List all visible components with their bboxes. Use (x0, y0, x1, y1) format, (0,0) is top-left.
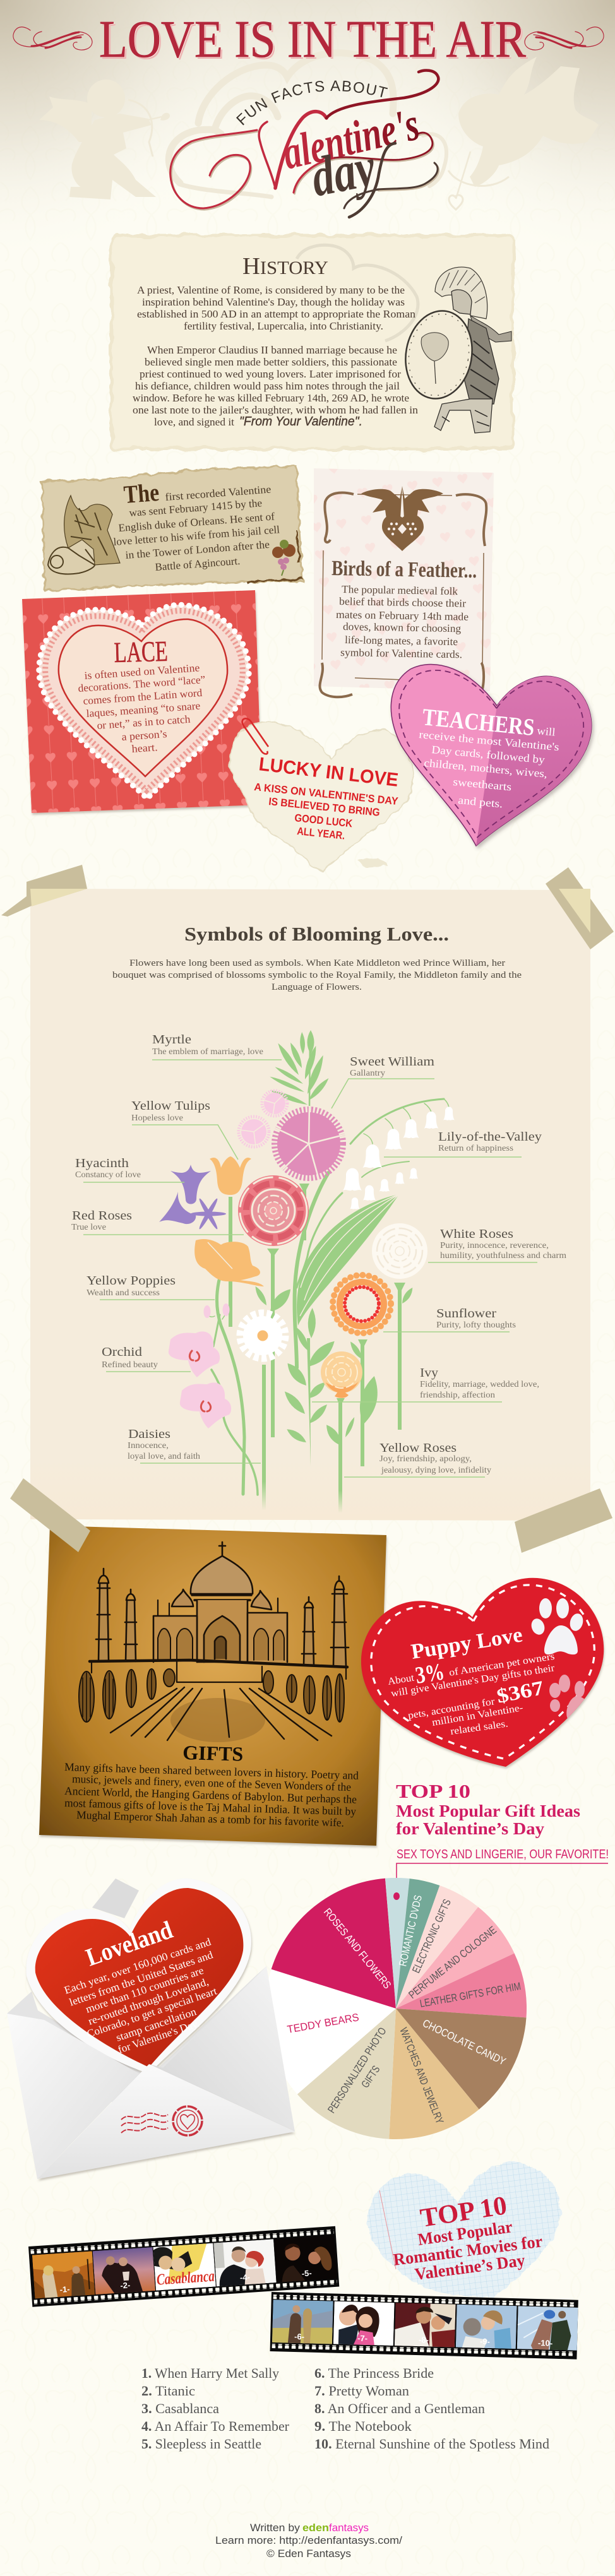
loveland text: stamp cancellation (114, 2005, 198, 2044)
label: yellow poppies: Wealth and success (87, 1288, 160, 1297)
birds text: mates on February 14th made (336, 608, 469, 623)
bouquet illustration (159, 1030, 455, 1513)
lace text: laques, meaning “to snare (86, 699, 201, 720)
title: LOVE IS IN THE AIR (101, 12, 528, 71)
movie list: 1. When Harry Met Sally (141, 2365, 279, 2381)
frame 8: -8- (419, 2335, 429, 2345)
icon: postmark stamp (121, 2106, 202, 2135)
teachers text: Day cards, followed by (431, 743, 546, 766)
icon: hyacinth (159, 1165, 226, 1230)
puppy love text: pets, accounting for (407, 1696, 496, 1721)
panel: lucky in love (230, 718, 414, 872)
gifts text: Ancient World, the Hanging Gardens of Babylon. But perhaps the (64, 1784, 357, 1806)
envelope back (7, 1966, 278, 2102)
history text: When Emperor Claudius II banned marriage because he (147, 344, 397, 356)
label: red roses (71, 1209, 244, 1235)
pie labels: PERFUME AND COLOGNE (407, 1924, 499, 2001)
label: orchid: Refined beauty (102, 1360, 158, 1369)
lace heading: LACE (114, 635, 168, 668)
icon: tulip (210, 1156, 251, 1195)
icon: white paw (529, 1598, 585, 1654)
teachers text: children, mothers, wives, (424, 756, 548, 780)
pie labels: CHOCOLATE CANDY (421, 2017, 508, 2068)
loveland text: Loveland (82, 1915, 176, 1971)
label: ivy: Fidelity, marriage, wedded love, (420, 1379, 539, 1389)
panel: symbols of blooming love (1, 865, 614, 1553)
loveland text (63, 1915, 218, 2056)
pie labels: ROSES AND FLOWERS (321, 1906, 393, 1991)
footer credits (215, 2522, 402, 2560)
panel: movies heart (367, 2162, 561, 2298)
panel: puppy love (361, 1578, 604, 1767)
gifts text: Mughal Emperor Shah Jahan as a tomb for his favorite wife. (76, 1808, 344, 1829)
footer credits: eden (302, 2522, 329, 2534)
frame 9: -9- (480, 2337, 490, 2346)
frame 3 (153, 2243, 216, 2291)
icon: sweet william (239, 1091, 349, 1182)
frame 1 (32, 2251, 95, 2299)
movies heading: Valentine’s Day (414, 2250, 527, 2284)
panel: lace (22, 590, 262, 813)
history text: love, and signed it (154, 416, 234, 428)
movies heading: TOP 10 (418, 2191, 509, 2233)
flowers intro text: Language of Flowers. (272, 982, 362, 992)
history text: window. Before he was killed February 14th, 269 AD, he wrote (133, 392, 409, 404)
movie list: 10. Eternal Sunshine of the Spotless Mind (314, 2436, 549, 2452)
pie labels: ROMANTIC DVDS (397, 1894, 424, 1968)
heading: top 10 gift ideas: TOP 10 (396, 1780, 470, 1802)
cupid left (39, 80, 170, 199)
gifts heading: GIFTS (182, 1741, 244, 1766)
frame 5 (282, 2243, 332, 2282)
label: white roses (428, 1227, 567, 1262)
footer credits: fantasys (329, 2522, 369, 2534)
loveland text: re-routed through Loveland, (87, 1976, 210, 2027)
panel: first valentine (42, 466, 302, 591)
frame 6 (272, 2300, 333, 2344)
teachers text: receive the most Valentine's (419, 728, 560, 753)
frame 5: -5- (301, 2268, 312, 2278)
label: yellow tulips: Hopeless love (131, 1113, 183, 1122)
illustration: roman soldier (399, 267, 511, 433)
label: daisies: loyal love, and faith (128, 1451, 200, 1461)
icon: lace heart (39, 605, 249, 798)
title: LOVE IS IN THE AIR (100, 11, 527, 69)
film strip: movies 1 to 5 (28, 2226, 339, 2307)
panel: teachers heart (391, 664, 592, 846)
lucky text: ALL YEAR. (297, 825, 345, 842)
icon: sunflower (333, 1275, 391, 1333)
frame 8 (394, 2303, 456, 2347)
envelope left panel (7, 2014, 139, 2179)
lace text: a person’s (121, 728, 167, 743)
label: yellow roses (344, 1441, 491, 1477)
puppy love text: of American pet owners (448, 1651, 556, 1678)
lace text: or net,” as in to catch (97, 713, 191, 732)
label: daisies (128, 1427, 261, 1463)
birds text: symbol for Valentine cards. (340, 646, 462, 660)
icon: white rose (372, 1223, 427, 1279)
label: orchid (102, 1345, 191, 1372)
movie list: 9. The Notebook (314, 2418, 412, 2434)
label: red roses: Red Roses (72, 1209, 132, 1223)
subtitle: fun facts about valentine's day: day (306, 136, 381, 209)
movie list: 4. An Affair To Remember (141, 2418, 290, 2434)
gifts text (64, 1760, 359, 1829)
label: daisies: Innocence, (128, 1440, 169, 1450)
teachers text: TEACHERS (421, 704, 535, 741)
gifts text: music, jewels and finery, even one of the Seven Wonders of the (72, 1772, 351, 1793)
stems (207, 1035, 449, 1513)
label: hyacinth: Hyacinth (75, 1156, 129, 1170)
loveland text: Colorado, to get a special heart (85, 1985, 218, 2040)
footer credits: Learn more: http://edenfantasys.com/ (215, 2534, 402, 2546)
red heart (35, 1888, 243, 2067)
pie labels: ELECTRONIC GIFTS (410, 1897, 453, 1975)
tape top left (1, 865, 87, 917)
panel: gifts (39, 1526, 386, 1846)
birds text: doves, known for choosing (343, 620, 462, 634)
history text: "From Your Valentine". (239, 415, 362, 429)
icon: yellow poppy (194, 1239, 264, 1286)
label: daisies: Daisies (128, 1427, 170, 1441)
teachers text (419, 704, 560, 810)
birds text: The popular medieval folk (342, 583, 458, 597)
frame 4 (213, 2239, 277, 2286)
footer credits: Written by (250, 2522, 301, 2534)
label: yellow roses: jealousy, dying love, infidelity (381, 1465, 491, 1475)
puppy love text: Puppy Love (409, 1623, 524, 1664)
label: yellow poppies: Yellow Poppies (87, 1274, 176, 1288)
first valentine text: love letter to his wife from his jail cell (113, 523, 280, 548)
history text: priest continued to wed young lovers. Later imprisoned for (140, 368, 401, 380)
pie labels: LEATHER GIFTS FOR HIM (419, 1980, 522, 2010)
envelope back flap (92, 1879, 139, 1918)
label: sweet william: Gallantry (350, 1068, 385, 1077)
first valentine text: Battle of Agincourt. (155, 555, 241, 573)
label: ivy: Ivy (420, 1366, 438, 1380)
footer credits: © Eden Fantasys (266, 2548, 351, 2560)
puppy love text: About (387, 1672, 415, 1687)
gifts text: most famous gifts of love is the Taj Mahal in India. It was built by (64, 1796, 356, 1818)
flowers intro text (112, 958, 522, 992)
first valentine text: The (122, 478, 160, 509)
history text: inspiration behind Valentine's Day, though the holiday was (142, 296, 405, 308)
leaves (253, 1030, 415, 1448)
birds text (336, 583, 469, 660)
label: yellow poppies (87, 1274, 215, 1300)
lace text: comes from the Latin word (83, 687, 203, 707)
label: hyacinth (75, 1156, 184, 1182)
loveland text: for Valentine's Day. (116, 2017, 201, 2056)
panel: loveland envelope (7, 1879, 295, 2179)
heading: top 10 gift ideas: Most Popular Gift Ideas (396, 1801, 580, 1820)
loveland text: Each year, over 160,000 cards and (63, 1935, 213, 1997)
label: white roses: White Roses (440, 1227, 513, 1241)
label: yellow tulips (131, 1099, 238, 1160)
label: yellow tulips: Yellow Tulips (131, 1099, 210, 1113)
lace text: heart. (131, 741, 158, 755)
tape bottom left (10, 1478, 90, 1552)
history text: established in 500 AD in an attempt to appropriate the Roman (137, 308, 416, 320)
loveland text: more than 110 countries are (84, 1964, 205, 2015)
teachers text: will (537, 724, 556, 739)
puppy love text: $367 (494, 1676, 546, 1707)
birds text: belief that birds choose their (339, 595, 467, 610)
icon: orchids (169, 1303, 231, 1428)
flowers heading: Symbols of Blooming Love... (184, 923, 449, 945)
frame 1: -1- (59, 2284, 70, 2294)
movie list: 7. Pretty Woman (314, 2383, 409, 2399)
icon: yellow rose (321, 1351, 362, 1398)
flowers intro text: Flowers have long been used as symbols. When Kate Middleton wed Prince William, her (129, 958, 505, 968)
movie list: 2. Titanic (141, 2383, 195, 2399)
lace text: decorations. The word “lace” (78, 674, 206, 694)
history text: believed single men made better soldiers, this passionate (145, 356, 397, 368)
history heading: HISTORY (242, 253, 328, 280)
subtitle: fun facts about valentine's day (169, 69, 440, 218)
film strip: movies 6 to 10 (270, 2292, 578, 2359)
movies heading: Romantic Movies for (392, 2231, 544, 2269)
puppy love text: million in Valentine- (431, 1702, 524, 1728)
pie labels: PERSONALIZED PHOTO (325, 2026, 389, 2115)
frame 6: -6- (294, 2332, 304, 2341)
birds heading: Birds of a Feather... (331, 557, 477, 583)
label: sweet william (331, 1055, 434, 1108)
movie list (141, 2365, 549, 2452)
title: LOVE IS IN THE AIR (99, 10, 526, 69)
icon: grape ornament (272, 540, 296, 576)
label: orchid: Orchid (102, 1345, 142, 1359)
movies heading (392, 2191, 544, 2284)
flowers intro text: bouquet was comprised of blossoms symbolic to the Royal Family, the Middleton family and the (112, 970, 522, 980)
label: yellow roses: Yellow Roses (379, 1441, 457, 1455)
puppy love text: related sales. (450, 1718, 509, 1737)
callout: sex toys and lingerie (397, 1848, 609, 1895)
label: hyacinth: Constancy of love (75, 1170, 141, 1179)
illustration: griffin (48, 496, 120, 574)
white heart card (26, 1879, 251, 2074)
label: sunflower: Purity, lofty thoughts (436, 1320, 516, 1329)
loveland text: letters from the United States and (68, 1949, 215, 2009)
icon: daisy (241, 1314, 285, 1358)
first valentine text: in the Tower of London after the (125, 538, 270, 561)
label: yellow roses: Joy, friendship, apology, (379, 1454, 472, 1463)
pie labels: WATCHES AND JEWELRY (397, 2026, 446, 2125)
gifts text: Many gifts have been shared between lovers in history. Poetry and (64, 1760, 359, 1782)
lucky text: LUCKY IN LOVE (258, 754, 400, 791)
illustration: taj mahal (79, 1542, 349, 1742)
heading: top 10 gift ideas (396, 1780, 580, 1838)
label: lily of the valley (384, 1130, 542, 1157)
panel: history (111, 235, 513, 449)
label: myrtle: Myrtle (152, 1033, 191, 1047)
movie list: 6. The Princess Bride (314, 2365, 434, 2381)
label: myrtle (152, 1033, 282, 1060)
label: red roses: True love (71, 1222, 106, 1232)
first valentine text: English duke of Orleans. He sent of (118, 510, 275, 534)
frame 3: -3- (181, 2279, 191, 2289)
flourish left (13, 27, 92, 50)
frame 7 (333, 2301, 394, 2346)
tape bottom right (515, 1488, 612, 1553)
pie labels (286, 1894, 522, 2125)
first valentine text (113, 478, 280, 573)
label: ivy (312, 1366, 539, 1402)
label: sunflower: Sunflower (436, 1307, 496, 1321)
birds text: life-long mates, a favorite (345, 634, 458, 648)
history text: fertility festival, Lupercalia, into Christianity. (184, 320, 383, 332)
history text (133, 284, 419, 429)
frame 9 (456, 2304, 516, 2349)
subtitle: fun facts about valentine's day: FUN FACTS ABOUT (236, 81, 388, 125)
history text: one last note to the jailer's daughter, with whom he had fallen in (133, 404, 419, 416)
puppy love text (387, 1623, 556, 1737)
frame 7: -7- (357, 2334, 367, 2343)
lucky text: A KISS ON VALENTINE'S DAY (254, 781, 399, 807)
lucky text: IS BELIEVED TO BRING (268, 795, 381, 819)
icon: paperclip (242, 718, 268, 754)
frame 10: -10- (538, 2338, 552, 2348)
icon: red rose (238, 1175, 309, 1246)
label: sweet william: Sweet William (350, 1055, 434, 1069)
teachers text: and pets. (458, 793, 503, 810)
panel: birds of a feather (314, 468, 494, 697)
pie labels: GIFTS (359, 2063, 383, 2090)
icon: lily of the valley (343, 1107, 455, 1209)
lace text (78, 662, 206, 755)
card frame (319, 493, 486, 697)
envelope right panel (149, 1966, 295, 2132)
first valentine text: first recorded Valentine (165, 483, 272, 503)
tape top right (546, 867, 614, 949)
movie list: 5. Sleepless in Seattle (141, 2436, 261, 2452)
movie list: 3. Casablanca (141, 2401, 219, 2416)
lucky text: GOOD LUCK (294, 812, 354, 829)
lace text: is often used on Valentine (84, 662, 200, 682)
lucky text (254, 754, 400, 842)
label: white roses: Purity, innocence, reverence, (440, 1240, 549, 1250)
label: sunflower (383, 1307, 516, 1332)
icon: two birds and heart (361, 486, 443, 551)
pie chart: top 10 gift ideas (265, 1878, 527, 2139)
label: ivy: friendship, affection (420, 1390, 495, 1399)
cupid right (448, 57, 599, 210)
puppy love text: 3% (414, 1658, 446, 1689)
label: white roses: humility, youthfulness and charm (440, 1250, 567, 1260)
frame 4: -4- (240, 2272, 250, 2282)
background hearts (169, 53, 446, 197)
heading: top 10 gift ideas: for Valentine’s Day (396, 1819, 545, 1838)
flourish right (525, 27, 604, 50)
frame 2 (92, 2247, 155, 2294)
pie labels: TEDDY BEARS (286, 2011, 360, 2036)
teachers text: sweethearts (453, 775, 512, 793)
subtitle: fun facts about valentine's day: alentine's (278, 98, 424, 180)
history text: A priest, Valentine of Rome, is considered by many to be the (137, 284, 405, 296)
history text: his defiance, children would pass him notes through the jail (135, 380, 400, 392)
icon: pink paw (549, 1675, 585, 1718)
label: lily of the valley: Return of happiness (438, 1143, 513, 1153)
label: lily of the valley: Lily-of-the-Valley (438, 1130, 542, 1144)
frame 2: -2- (120, 2280, 131, 2290)
puppy love text: will give Valentine's Day gifts to their (390, 1663, 556, 1699)
frame 10 (516, 2306, 578, 2351)
envelope front flap (37, 2064, 295, 2179)
movie list: 8. An Officer and a Gentleman (314, 2401, 485, 2416)
movies heading: Most Popular (417, 2217, 513, 2249)
label: myrtle: The emblem of marriage, love (152, 1047, 263, 1056)
first valentine text: was sent February 1415 by the (129, 497, 263, 519)
